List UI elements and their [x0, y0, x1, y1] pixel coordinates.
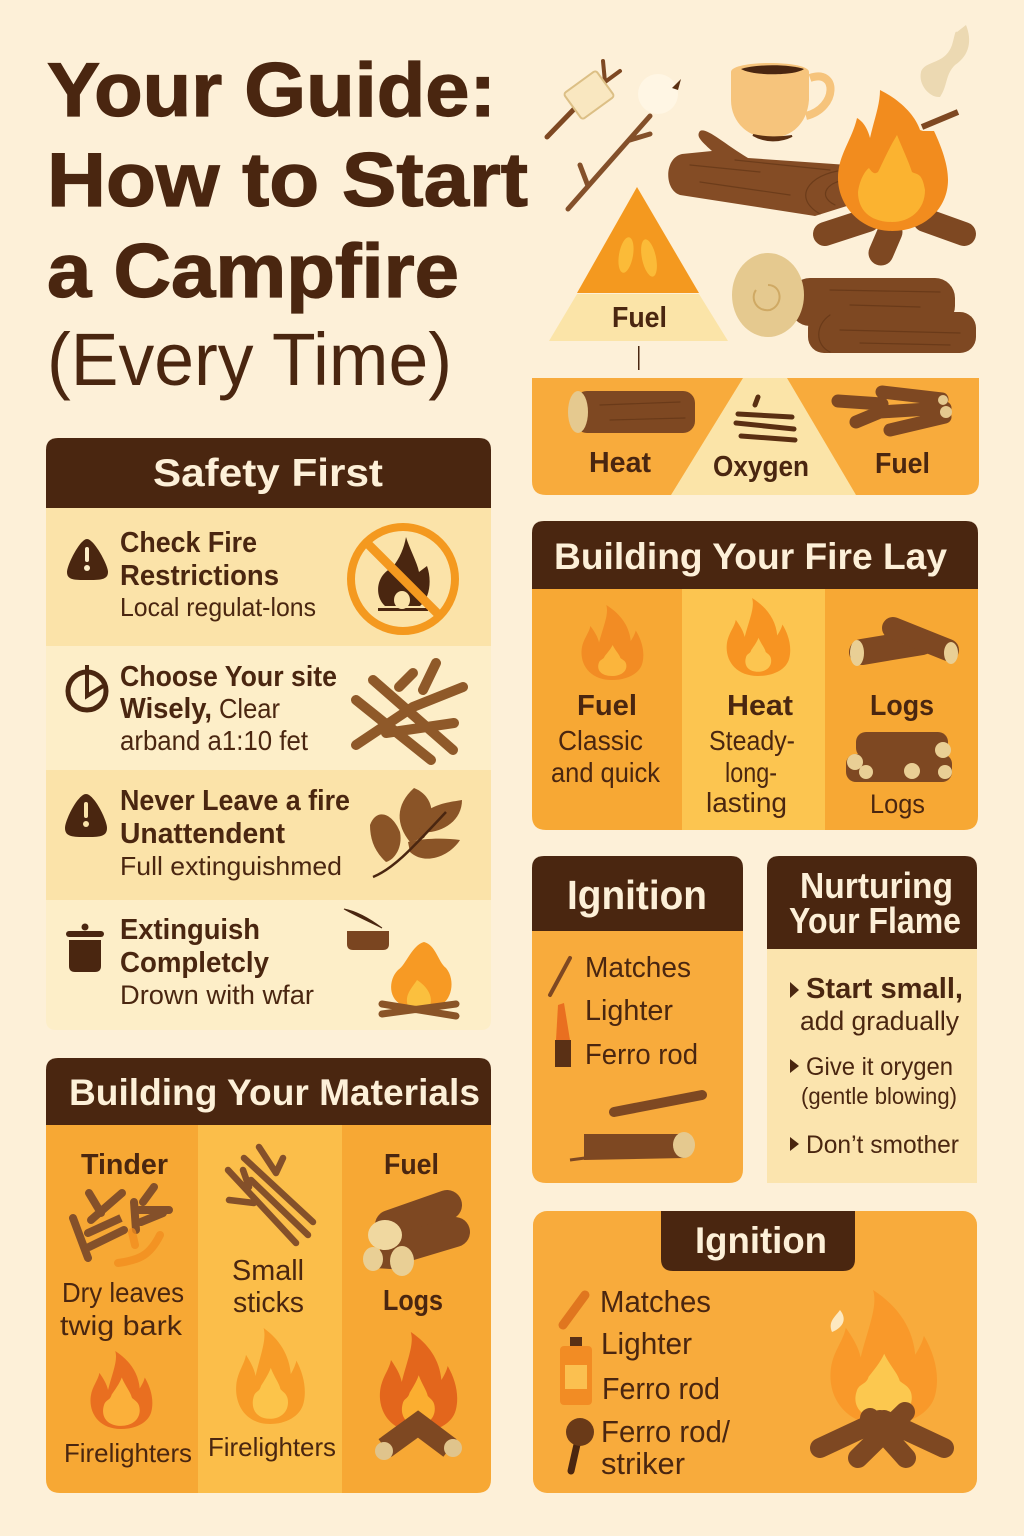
icon: log pile — [846, 732, 952, 782]
column backgrounds — [46, 1125, 491, 1493]
icon: thin logs — [570, 1095, 702, 1160]
column: fuel: and quick — [551, 757, 661, 788]
column: heat: Steady- — [709, 725, 795, 756]
column: fuel — [551, 605, 661, 788]
column: small sticks: Firelighters — [208, 1432, 336, 1462]
icon: match — [563, 1295, 585, 1325]
ignition list: Ferro rod — [585, 1039, 698, 1071]
heading — [46, 438, 491, 508]
panel: building your fire lay — [532, 521, 978, 830]
ignition list — [600, 1284, 730, 1481]
text: check fire restrictions: Check Fire — [120, 527, 257, 559]
text: extinguish completely: Extinguish — [120, 914, 260, 946]
icon: warning — [65, 794, 107, 837]
title: How to Start — [47, 138, 528, 223]
ignition list: Ferro rod — [602, 1371, 720, 1406]
column: tinder: Tinder — [81, 1149, 168, 1181]
icon: red flame — [90, 1351, 152, 1429]
panel: safety first — [46, 438, 491, 1030]
heading: Nurturing — [800, 865, 953, 906]
text: extinguish completely: Completcly — [120, 947, 269, 979]
panel: ignition — [532, 856, 743, 1183]
tip: give it oxygen: (gentle blowing) — [801, 1083, 957, 1109]
icon: campfire — [375, 1332, 462, 1460]
column: fuel — [363, 1149, 462, 1460]
text: choose your site — [120, 661, 337, 756]
tip: give it oxygen: Give it orygen — [806, 1053, 953, 1081]
heading tab — [661, 1211, 855, 1271]
tip: give it oxygen — [790, 1053, 957, 1109]
heading — [532, 521, 978, 589]
icon: flame — [581, 605, 643, 680]
icon: toasted marshmallow stick — [568, 74, 681, 209]
tip: start small: add gradually — [800, 1006, 959, 1036]
ignition list — [585, 952, 698, 1071]
column: heat: lasting — [706, 787, 787, 818]
heading: Safety First — [153, 452, 383, 495]
icon: match — [550, 958, 570, 995]
text: choose your site: Wisely, — [120, 693, 212, 725]
column: tinder: Firelighters — [64, 1438, 192, 1468]
title: a Campfire — [47, 229, 459, 314]
text: choose your site: arband a1:10 fet — [120, 725, 308, 756]
icon: leaves — [370, 788, 462, 877]
icon: dry leaves — [73, 1187, 169, 1258]
ignition list: Matches — [600, 1284, 711, 1319]
fire triangle — [549, 187, 728, 341]
icon: oxygen sticks — [736, 397, 795, 440]
text: check fire restrictions: Restrictions — [120, 560, 279, 592]
label: heat: Heat — [589, 447, 651, 479]
icon: flame — [727, 598, 790, 676]
title: Your Guide: — [47, 48, 496, 133]
icon: smoke — [921, 25, 969, 97]
icon: fuel sticks — [838, 392, 952, 430]
column: heat: Heat — [727, 690, 793, 722]
ignition list: Lighter — [585, 995, 673, 1027]
text: never leave a fire: Full extinguishmed — [120, 851, 342, 881]
icon: light flame — [236, 1328, 305, 1424]
text: never leave a fire — [120, 785, 350, 881]
icon: campfire — [820, 1290, 944, 1458]
column: logs — [846, 628, 958, 819]
ignition list: Lighter — [601, 1326, 692, 1361]
icon: striker — [566, 1418, 594, 1471]
column: small sticks: sticks — [233, 1287, 304, 1319]
icon: large log — [668, 130, 850, 216]
label: oxygen: Oxygen — [713, 451, 809, 483]
heading: Your Flame — [789, 900, 961, 941]
column: logs: Logs — [870, 690, 934, 722]
icon: small bucket and fire — [344, 909, 456, 1016]
icon: crossed sticks — [356, 663, 463, 760]
icon: warning — [67, 539, 108, 580]
column backgrounds — [532, 589, 978, 830]
column: fuel: Classic — [558, 725, 643, 756]
icon: stacked logs — [732, 253, 976, 353]
connector line — [638, 346, 640, 370]
text: choose your site: Choose Your site — [120, 661, 337, 693]
tip: start small: Start small, — [806, 973, 963, 1005]
ignition list: Matches — [585, 952, 691, 984]
column: fuel: Logs — [383, 1285, 443, 1317]
icon: lighter — [555, 1003, 571, 1067]
tip: don't smother: Don’t smother — [806, 1131, 959, 1159]
icon: campfire with flame — [825, 90, 964, 253]
tip: start small — [790, 973, 963, 1036]
icon: marshmallow on stick — [547, 61, 620, 137]
rows background — [46, 508, 491, 1030]
title: (Every Time) — [47, 318, 452, 401]
icon: log bundle — [363, 1205, 455, 1276]
heading — [46, 1058, 491, 1125]
text: check fire restrictions — [120, 527, 316, 622]
text: extinguish completely — [120, 914, 314, 1010]
column: fuel: Fuel — [384, 1149, 439, 1181]
panel: fire triangle elements — [532, 378, 979, 495]
text: check fire restrictions: Local regulat-lons — [120, 592, 316, 622]
title — [47, 48, 528, 401]
text: never leave a fire: Never Leave a fire — [120, 785, 350, 817]
text: extinguish completely: Drown with wfar — [120, 980, 314, 1010]
column: fuel: Fuel — [577, 690, 637, 722]
heading: Building Your Materials — [69, 1072, 480, 1113]
column: tinder: twig bark — [60, 1310, 183, 1341]
icon: pot — [66, 924, 104, 972]
icon: two logs — [850, 628, 958, 666]
column: small sticks: Small — [232, 1255, 304, 1287]
ignition list: striker — [601, 1446, 685, 1481]
panel: building your materials — [46, 1058, 491, 1493]
ignition list: Ferro rod/ — [601, 1414, 730, 1449]
column: logs: Logs — [870, 789, 925, 819]
heading tab: Ignition — [695, 1220, 827, 1261]
fire triangle: Fuel — [612, 302, 667, 334]
column: small sticks — [208, 1147, 336, 1462]
icon: coffee mug — [731, 63, 831, 140]
icon: lighter bottle — [560, 1337, 592, 1405]
icon: timer — [68, 665, 106, 710]
column: tinder: Dry leaves — [62, 1277, 184, 1308]
heading: Ignition — [567, 872, 707, 918]
icon: sticks — [228, 1147, 313, 1243]
text: never leave a fire: Unattendent — [120, 818, 285, 850]
column: heat: long- — [725, 757, 777, 788]
heading: Building Your Fire Lay — [554, 536, 947, 577]
icon: dry bark — [118, 1232, 160, 1263]
panel: ignition bottom — [533, 1211, 977, 1493]
panel: nurturing your flame — [767, 856, 977, 1183]
text: choose your site: Clear — [219, 693, 280, 724]
column: tinder — [60, 1149, 192, 1468]
heading — [767, 856, 977, 949]
icon: no fire sign — [351, 527, 455, 631]
heading — [532, 856, 743, 931]
column: heat — [706, 598, 795, 818]
icon: heat log — [568, 391, 695, 433]
label: fuel: Fuel — [875, 448, 930, 480]
